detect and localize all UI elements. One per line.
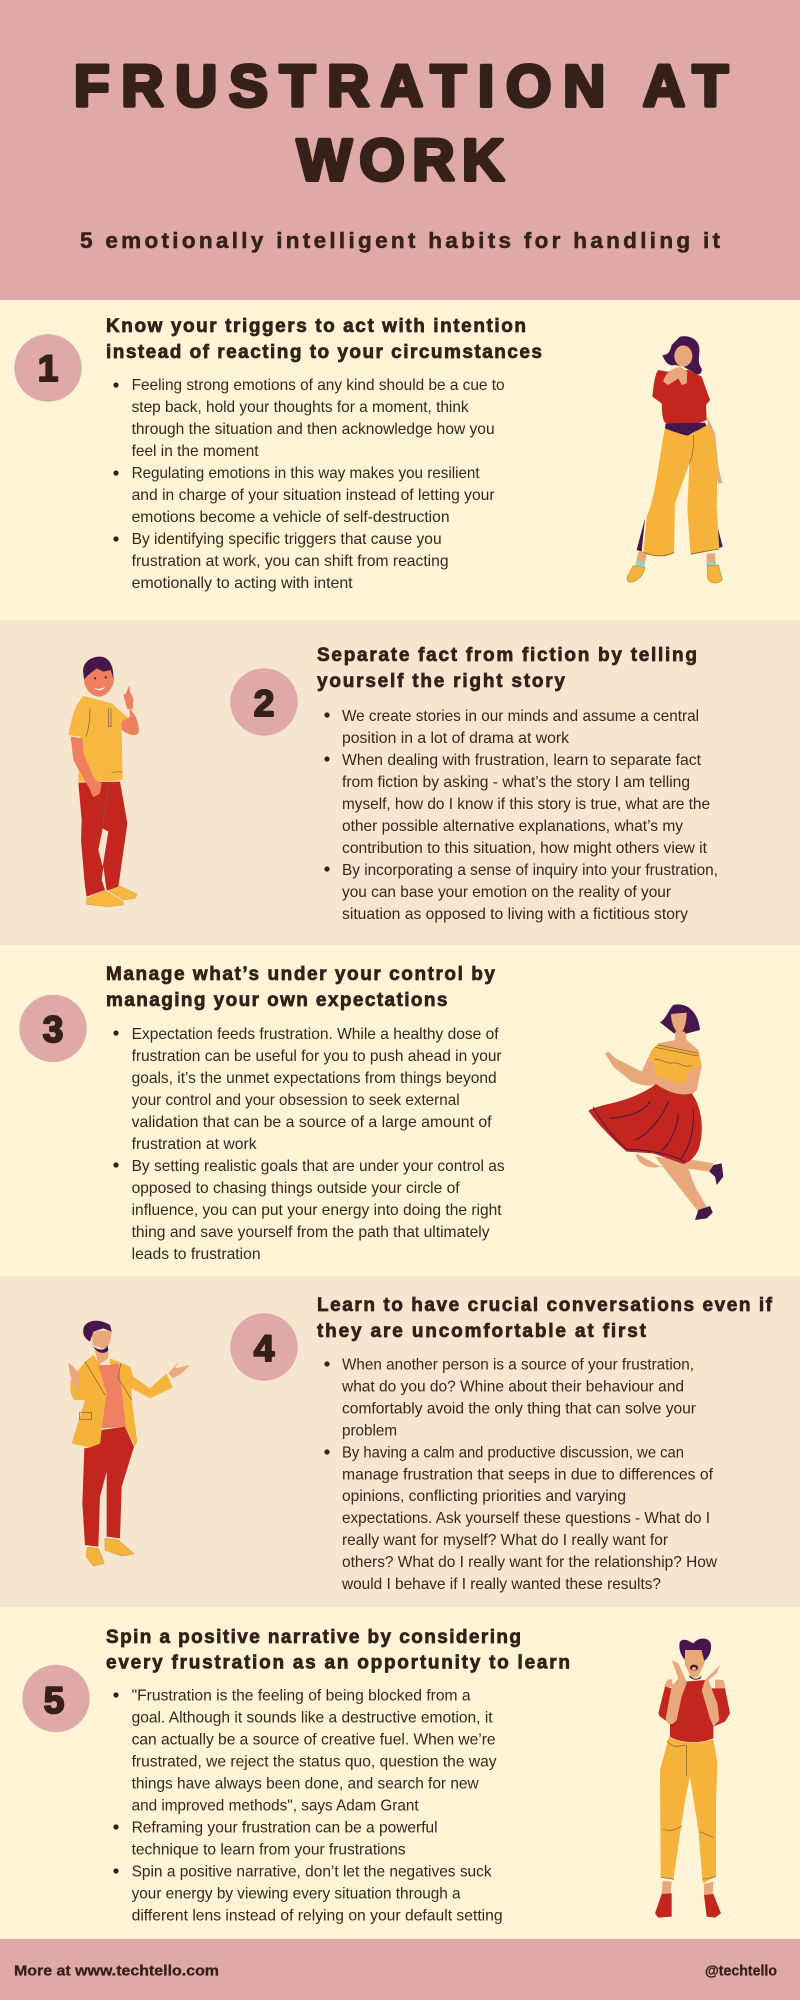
panel: habit 1: [0, 300, 800, 620]
bullet list: habit 2: When dealing with frustration, learn to separate fact: [342, 752, 702, 769]
bullet list: habit 4: problem: [342, 1422, 397, 1440]
bullet list: habit 5: and improved methods", says Adam Grant: [132, 1798, 419, 1814]
number badge 5: 5: [44, 1680, 64, 1721]
bullet list: habit 3: your control and your obsession to seek external: [132, 1092, 460, 1109]
bullet list: habit 4: manage frustration that seeps in due to differences of: [342, 1466, 714, 1484]
heading: habit 1: Know your triggers to act with intention: [106, 316, 526, 337]
heading: habit 4: [317, 1295, 773, 1342]
number badge 1: [14, 334, 82, 402]
subtitle: 5 emotionally intelligent habits for handling it: [80, 228, 720, 253]
bullet list: habit 1: through the situation and then acknowledge how you: [132, 421, 495, 438]
bullet list: habit 1: feel in the moment: [132, 443, 259, 460]
bullet list: habit 1: frustration at work, you can shift from reacting: [132, 553, 449, 570]
heading: habit 3: Manage what’s under your control by: [106, 964, 495, 985]
bullet list: habit 1: Feeling strong emotions of any kind should be a cue to: [132, 377, 505, 394]
bullet list: habit 1: step back, hold your thoughts for a moment, think: [132, 399, 470, 416]
bullet list: habit 4: would I behave if I really wanted these results?: [341, 1576, 661, 1593]
bullet list: habit 4: When another person is a source of your frustration,: [342, 1356, 694, 1374]
bullet list: habit 5: goal. Although it sounds like a destructive emotion, it: [132, 1710, 493, 1726]
bullet list: habit 2: contribution to this situation, how might others view it: [342, 840, 708, 857]
heading: habit 2: [317, 645, 697, 692]
bullet list: habit 5: technique to learn from your frustrations: [132, 1842, 406, 1858]
bullet list: habit 3: influence, you can put your energy into doing the right: [132, 1202, 502, 1219]
bullet list: habit 3: leads to frustration: [132, 1246, 261, 1263]
heading: habit 4: Learn to have crucial conversations even if: [317, 1295, 773, 1316]
number badge 4: [230, 1313, 298, 1381]
bullet list: habit 4: By having a calm and productive discussion, we can: [342, 1444, 684, 1462]
footer handle: @techtello: [705, 1964, 777, 1980]
bullet list: habit 2: myself, how do I know if this story is true, what are the: [342, 796, 710, 813]
bullet list: habit 5: "Frustration is the feeling of being blocked from a: [132, 1688, 471, 1704]
number badge 3: [19, 995, 87, 1062]
panel: header: [0, 0, 800, 300]
bullet list: habit 4: comfortably avoid the only thing that can solve your: [342, 1400, 697, 1418]
bullet list: habit 4: expectations. Ask yourself these questions - What do I: [342, 1510, 710, 1527]
bullet list: habit 4: others? What do I really want for the relationship? How: [342, 1554, 717, 1571]
illustration: woman pointing: [627, 336, 723, 583]
bullet list: habit 1: By identifying specific triggers that cause you: [132, 531, 442, 548]
number badge 2: 2: [254, 683, 274, 724]
bullet list: habit 3: frustration can be useful for you to push ahead in your: [132, 1048, 502, 1065]
bullet list: habit 1: [113, 377, 505, 592]
heading: habit 5: [106, 1627, 570, 1674]
illustration: man in blazer presenting: [68, 1321, 190, 1566]
title: FRUSTRATION AT: [74, 54, 728, 119]
title: WORK: [297, 128, 504, 193]
bullet list: habit 3: By setting realistic goals that are under your control as: [132, 1158, 505, 1175]
heading: habit 3: managing your own expectations: [106, 990, 448, 1011]
illustration: man thumbs up: [68, 657, 139, 907]
illustration: woman dancing: [588, 1004, 723, 1220]
bullet list: habit 5: your energy by viewing every situation through a: [132, 1886, 461, 1902]
bullet list: habit 2: you can base your emotion on the reality of your: [342, 884, 672, 901]
bullet list: habit 5: things have always been done, and search for new: [132, 1776, 479, 1792]
bullet list: habit 3: frustration at work: [132, 1136, 258, 1153]
heading: habit 2: yourself the right story: [317, 671, 565, 692]
heading: habit 5: every frustration as an opportunity to learn: [106, 1652, 570, 1674]
panel: habit 2: [0, 620, 800, 945]
number badge 5: [22, 1665, 90, 1732]
bullet list: habit 2: from fiction by asking - what’s the story I am telling: [342, 774, 690, 791]
heading: habit 5: Spin a positive narrative by considering: [106, 1627, 521, 1648]
bullet list: habit 1: emotionally to acting with intent: [132, 575, 353, 592]
heading: habit 1: instead of reacting to your circumstances: [106, 342, 542, 363]
bullet list: habit 5: Reframing your frustration can be a powerful: [132, 1820, 438, 1836]
bullet list: habit 5: can actually be a source of creative fuel. When we’re: [132, 1732, 496, 1748]
panel: footer: [0, 1939, 800, 2000]
bullet list: habit 2: By incorporating a sense of inquiry into your frustration,: [342, 862, 718, 879]
bullet list: habit 3: [113, 1026, 505, 1263]
bullet list: habit 4: opinions, conflicting priorities and varying: [342, 1488, 626, 1505]
bullet list: habit 4: really want for myself? What do I really want for: [342, 1532, 669, 1549]
bullet list: habit 3: opposed to chasing things outside your circle of: [132, 1180, 460, 1197]
number badge 4: 4: [254, 1328, 275, 1369]
bullet list: habit 2: [324, 708, 718, 923]
bullet list: habit 3: Expectation feeds frustration. While a healthy dose of: [132, 1026, 499, 1043]
panel: habit 3: [0, 945, 800, 1276]
panel: habit 5: [0, 1607, 800, 1939]
heading: habit 1: [106, 316, 542, 363]
number badge 3: 3: [43, 1009, 63, 1050]
bullet list: habit 5: different lens instead of relying on your default setting: [132, 1908, 503, 1924]
bullet list: habit 2: position in a lot of drama at work: [342, 730, 570, 747]
panel: habit 4: [0, 1276, 800, 1607]
heading: habit 2: Separate fact from fiction by telling: [317, 645, 697, 666]
bullet list: habit 5: Spin a positive narrative, don’t let the negatives suck: [132, 1864, 493, 1880]
number badge 2: [230, 668, 298, 736]
illustration: surprised woman: [655, 1639, 730, 1918]
heading: habit 4: they are uncomfortable at first: [317, 1321, 647, 1342]
bullet list: habit 4: what do you do? Whine about their behaviour and: [341, 1378, 684, 1396]
bullet list: habit 1: and in charge of your situation instead of letting your: [132, 487, 495, 504]
bullet list: habit 2: other possible alternative explanations, what’s my: [342, 818, 683, 835]
bullet list: habit 1: Regulating emotions in this way makes you resilient: [132, 465, 480, 482]
bullet list: habit 3: goals, it’s the unmet expectations from things beyond: [132, 1070, 497, 1087]
bullet list: habit 2: situation as opposed to living with a fictitious story: [342, 906, 688, 923]
bullet list: habit 1: emotions become a vehicle of self-destruction: [132, 509, 450, 526]
bullet list: habit 5: frustrated, we reject the status quo, question the way: [132, 1754, 497, 1770]
heading: habit 3: [106, 964, 495, 1011]
title: [74, 54, 728, 193]
bullet list: habit 5: [113, 1688, 503, 1924]
bullet list: habit 2: We create stories in our minds and assume a central: [342, 708, 699, 725]
number badge 1: 1: [38, 348, 58, 389]
bullet list: habit 4: [324, 1356, 717, 1593]
footer link: More at www.techtello.com: [14, 1964, 219, 1980]
bullet list: habit 3: thing and save yourself from the path that ultimately: [132, 1224, 490, 1241]
bullet list: habit 3: validation that can be a source of a large amount of: [132, 1114, 492, 1131]
